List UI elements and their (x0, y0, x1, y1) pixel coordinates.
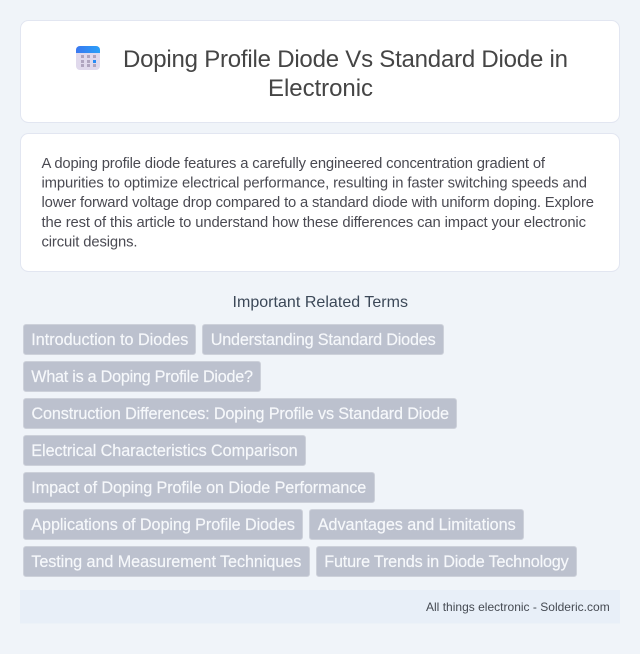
footer (20, 590, 620, 624)
tag: understanding standard diodes (202, 324, 444, 354)
description text: impurities to optimize electrical performance, resulting in faster switching speeds and (42, 176, 587, 192)
title text: Doping Profile Diode Vs Standard Diode in (123, 46, 568, 73)
description text: lower forward voltage drop compared to a standard diode with uniform doping. Explore (42, 195, 594, 211)
tag: impact of doping profile (24, 472, 374, 502)
tag: testing and measurement: Testing and Measurement Techniques (31, 553, 301, 571)
tag: construction differences: Construction Differences: Doping Profile vs Standard Diode (32, 405, 449, 423)
title panel (20, 20, 620, 122)
description text: circuit designs. (42, 234, 138, 250)
tag: advantages and limitations (310, 510, 524, 540)
tag: electrical characteristics comparison: Electrical Characteristics Comparison (31, 442, 298, 460)
tag: future trends (316, 546, 576, 576)
tag: what is a doping profile diode (24, 362, 260, 392)
tag: construction differences (24, 398, 456, 428)
tag: applications: Applications of Doping Profile Diodes (31, 516, 295, 534)
tag: introduction to diodes: Introduction to Diodes (31, 331, 188, 349)
tag: advantages and limitations: Advantages and Limitations (318, 516, 516, 534)
tag list (24, 324, 576, 576)
panel: description (20, 134, 620, 272)
tag: understanding standard diodes: Understanding Standard Diodes (211, 331, 436, 349)
description text: the rest of this article to understand how these differences can impact your electronic (42, 215, 587, 231)
description text: A doping profile diode features a carefully engineered concentration gradient of (42, 156, 546, 172)
tag: introduction to diodes (24, 324, 196, 354)
title text (123, 46, 568, 102)
tag: applications (24, 510, 302, 540)
icon: calendar grid (76, 46, 100, 70)
tag: testing and measurement (24, 546, 310, 576)
tag: future trends: Future Trends in Diode Technology (324, 553, 570, 571)
title text: Electronic (268, 75, 373, 102)
tag: impact of doping profile: Impact of Doping Profile on Diode Performance (31, 479, 366, 497)
footer: All things electronic - Solderic.com (426, 600, 610, 614)
heading: important related terms: Important Related Terms (232, 294, 408, 311)
tag: electrical characteristics comparison (24, 436, 306, 466)
description text (42, 156, 594, 250)
tag: what is a doping profile diode: What is a Doping Profile Diode? (31, 368, 253, 386)
